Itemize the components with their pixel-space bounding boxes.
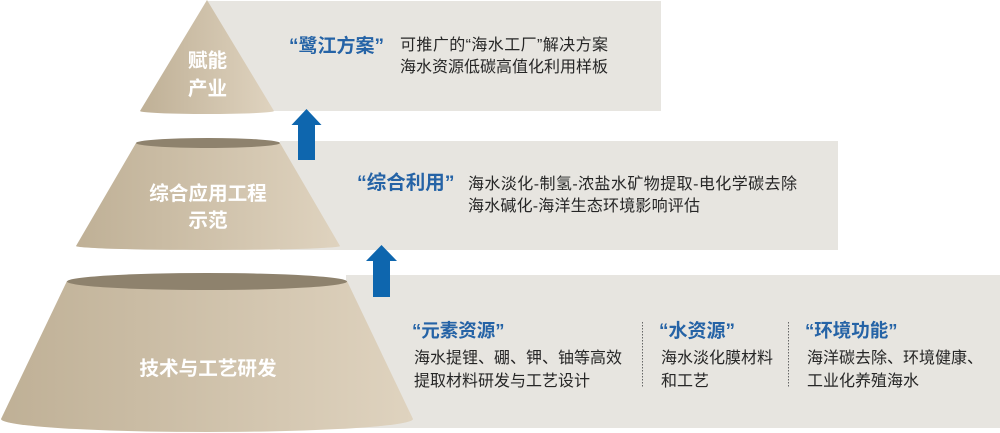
column: 元素资源 [412,320,622,390]
column: 水资源: “水资源” [659,320,735,342]
panel: top tier [208,1,661,111]
heading: 综合利用: “综合利用” [357,171,455,194]
panel: bottom tier [346,275,1000,428]
column: 环境功能: 海洋碳去除、环境健康、 [807,348,983,367]
text block: top tier description [400,36,608,76]
arrow: top [292,109,322,160]
column: 水资源: 海水淡化膜材料 [661,349,773,367]
text block: middle tier description: 海水碱化-海洋生态环境影响评估 [468,196,700,215]
pyramid tier: 赋能产业: 产业 [188,78,227,100]
text block: middle tier description [468,175,797,215]
heading: 鹭江方案: “鹭江方案” [289,34,384,57]
pyramid tier: 综合应用工程示范 [76,138,340,250]
pyramid tier: 综合应用工程示范: 综合应用工程 [149,182,267,205]
text block: top tier description: 海水资源低碳高值化利用样板 [400,58,608,76]
column: 水资源 [659,320,773,390]
arrow: bottom [366,245,397,297]
column: 环境功能: “环境功能” [805,320,898,341]
pyramid tier: 技术与工艺研发 [1,273,413,432]
text block: middle tier description: 海水淡化-制氢-浓盐水矿物提取-电化学碳去除 [468,175,797,193]
column: 环境功能 [805,320,983,390]
pyramid tier: 赋能产业 [140,0,274,114]
column: 水资源: 和工艺 [661,372,709,390]
column: 元素资源: “元素资源” [412,320,505,341]
text block: top tier description: 可推广的“海水工厂”解决方案 [400,36,608,54]
column: 元素资源: 提取材料研发与工艺设计 [414,372,590,390]
column: 环境功能: 工业化养殖海水 [807,372,919,390]
pyramid tier: 赋能产业: 赋能 [188,50,227,72]
column: 元素资源: 海水提锂、硼、钾、铀等高效 [414,349,622,367]
pyramid tier: 综合应用工程示范: 示范 [188,210,228,232]
pyramid tier: 技术与工艺研发: 技术与工艺研发 [139,357,277,380]
panel: middle tier [280,141,838,250]
